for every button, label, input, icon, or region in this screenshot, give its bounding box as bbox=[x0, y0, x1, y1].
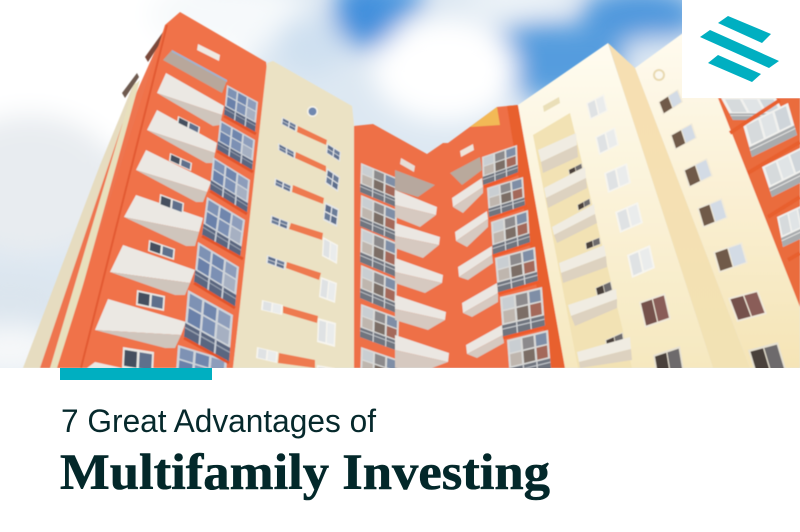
central curved balconies bbox=[395, 170, 449, 368]
right orange section bay windows bbox=[721, 98, 800, 260]
left tower main orange wall bbox=[57, 12, 268, 368]
right-centre bay windows bbox=[482, 145, 551, 380]
teal accent bar bbox=[60, 368, 212, 380]
right tower window column A bbox=[586, 94, 685, 385]
cream wall windows and orange strips bbox=[256, 106, 341, 388]
left small windows bbox=[122, 116, 200, 373]
central bay windows bbox=[360, 163, 399, 395]
logo block bbox=[682, 0, 800, 98]
white caption panel bbox=[0, 368, 800, 532]
logo: three teal bars bbox=[700, 16, 779, 82]
left tower cream wall bbox=[233, 61, 354, 368]
left tower side walls bbox=[23, 24, 170, 368]
left balconies bbox=[87, 73, 224, 368]
left balcony roof bbox=[163, 50, 227, 93]
right tower walls bbox=[518, 33, 800, 368]
left bay windows bbox=[175, 85, 258, 400]
right tower window column B bbox=[658, 89, 787, 380]
right-centre balconies bbox=[450, 157, 504, 358]
main title: Multifamily Investing bbox=[60, 445, 550, 501]
vents bbox=[197, 44, 665, 172]
right tower balcony recess and balconies bbox=[533, 113, 632, 368]
photo: apartment building against sky bbox=[0, 0, 800, 400]
subtitle: 7 Great Advantages of bbox=[61, 403, 376, 439]
central orange wall bbox=[354, 105, 565, 368]
sky with clouds bbox=[0, 0, 800, 375]
building bbox=[23, 12, 800, 400]
